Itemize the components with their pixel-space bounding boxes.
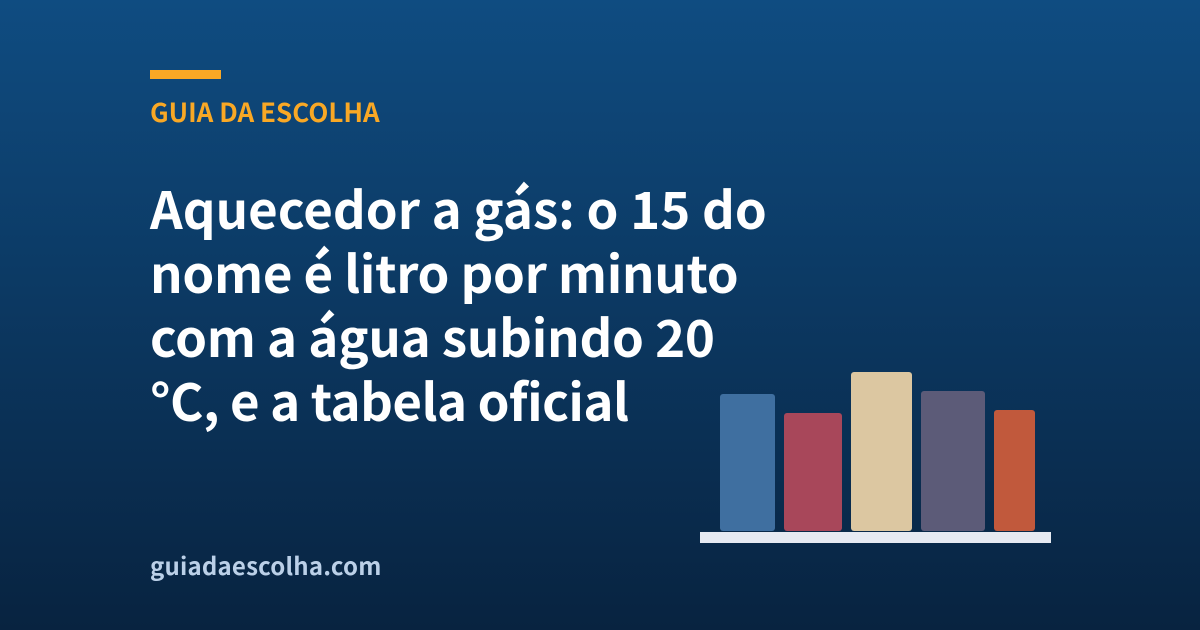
title xyxy=(150,170,767,436)
title: Aquecedor a gás: o 15 do xyxy=(150,170,767,244)
book: red xyxy=(784,413,842,531)
title: com a água subindo 20 xyxy=(150,298,715,372)
accent bar xyxy=(150,70,221,79)
book: orange xyxy=(994,410,1035,531)
brand heading: GUIA DA ESCOLHA xyxy=(150,93,380,130)
icon: books on shelf xyxy=(700,372,1051,543)
title: nome é litro por minuto xyxy=(150,234,738,308)
website url: guiadaescolha.com xyxy=(150,547,382,582)
book: blue xyxy=(720,394,775,531)
title: °C, e a tabela oficial xyxy=(150,362,628,436)
shelf xyxy=(700,532,1051,543)
book: beige xyxy=(851,372,912,531)
book: purple xyxy=(921,391,985,531)
